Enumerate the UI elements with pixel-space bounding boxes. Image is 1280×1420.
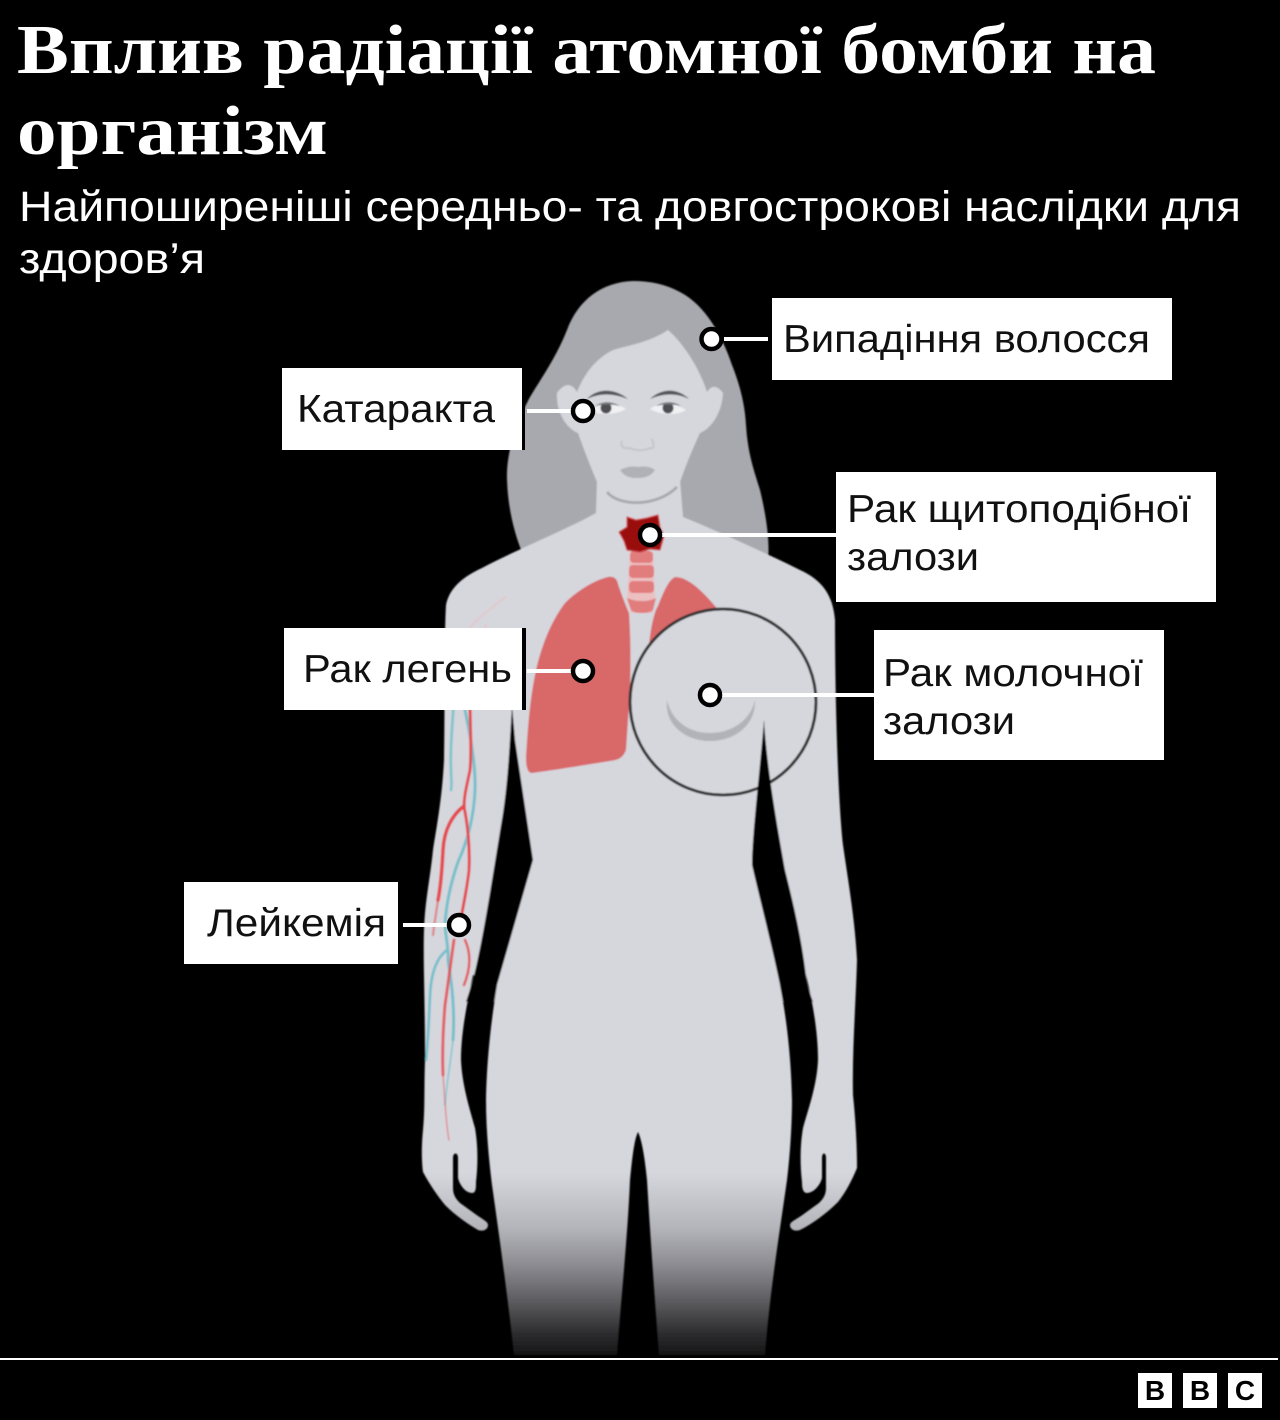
connector: thyroid (640, 525, 836, 545)
label: leukemia: Лейкемія (207, 902, 386, 945)
trachea (627, 551, 656, 613)
subtitle: здоров’я (19, 235, 205, 283)
label: breast cancer: Рак молочної (883, 652, 1143, 695)
left lung (526, 577, 630, 773)
faint upper veins (469, 597, 505, 660)
label: thyroid cancer: залози (847, 536, 979, 579)
subtitle: Найпоширеніші середньо- та довгострокові наслідки для (19, 183, 1241, 231)
BBC logo: B (1190, 1375, 1210, 1406)
face (557, 330, 723, 508)
label: hair loss (772, 298, 1172, 380)
human figure (422, 281, 857, 1355)
thyroid (619, 515, 664, 552)
mouth (620, 466, 655, 478)
hair (507, 281, 769, 562)
arm veins (426, 597, 505, 1140)
label: thyroid cancer (836, 472, 1216, 602)
eyebrows (587, 391, 689, 399)
label: thyroid cancer: Рак щитоподібної (847, 488, 1191, 531)
subtitle (19, 183, 1241, 283)
breast crescent (667, 700, 755, 741)
arm gap right (752, 720, 813, 1002)
right lung (649, 577, 720, 650)
label: hair loss: Випадіння волосся (783, 318, 1150, 361)
title: Вплив радіації атомної бомби на (17, 12, 1156, 89)
nose (621, 439, 654, 450)
body silhouette (422, 480, 857, 1355)
connector: eye (527, 401, 593, 421)
label: breast cancer: залози (883, 700, 1015, 743)
label: cataract (282, 368, 525, 450)
connector: lung (527, 661, 593, 681)
connector: blood (403, 915, 469, 935)
BBC logo (1138, 1373, 1262, 1408)
arm gap left (466, 705, 533, 1002)
connector: hair (702, 329, 768, 349)
BBC logo: C (1235, 1375, 1255, 1406)
title: організм (17, 93, 328, 170)
label: leukemia (184, 882, 398, 964)
BBC logo: B (1145, 1375, 1165, 1406)
red veins (433, 700, 471, 1140)
label: cataract: Катаракта (297, 388, 495, 431)
connector: breast (700, 685, 874, 705)
eyes (590, 402, 686, 414)
breast inset circle (630, 609, 816, 795)
teal veins (426, 700, 475, 1105)
label: lung cancer (284, 628, 526, 710)
chin line (607, 487, 677, 503)
title (17, 12, 1156, 170)
label: lung cancer: Рак легень (303, 648, 512, 691)
label: breast cancer (874, 630, 1164, 760)
